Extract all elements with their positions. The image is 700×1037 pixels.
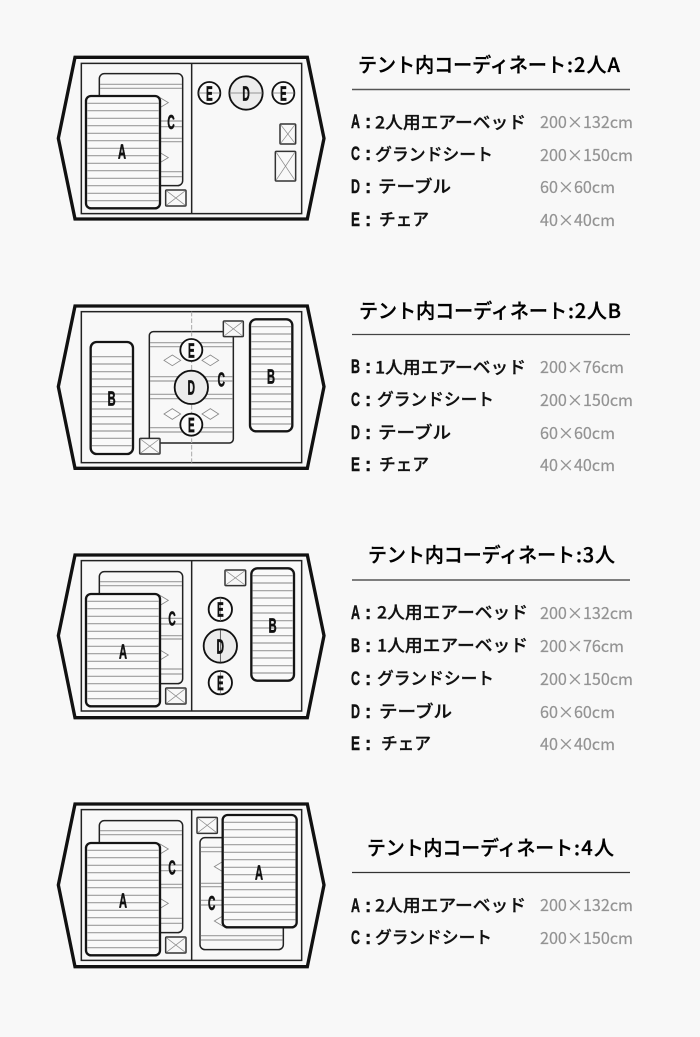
legend: 3 people: テーブル — [379, 698, 452, 723]
legend: 3 people: : — [365, 636, 371, 657]
legend: 4 people: 200×150cm — [540, 925, 633, 949]
chair E left — [198, 82, 220, 105]
air bed B: B — [269, 615, 277, 637]
chair E left: E — [206, 83, 213, 105]
table D — [175, 371, 208, 404]
storage box right — [197, 817, 217, 833]
ground sheet C — [149, 332, 233, 443]
legend: 3 people — [351, 580, 633, 755]
legend: 2 people A: 40×40cm — [540, 207, 615, 231]
inner floor with divider — [81, 561, 302, 711]
legend: 4 people: : — [365, 928, 371, 949]
legend: 3 people: : — [365, 702, 371, 723]
panel: tent layout 4 people — [58, 804, 324, 967]
air bed B left: B — [108, 389, 116, 411]
heading: 2 people B: テント内コーディネート — [359, 295, 567, 324]
legend: 2 people B: 1人用エアーベッド — [375, 354, 526, 379]
legend: 2 people B: 40×40cm — [540, 452, 615, 476]
legend: 2 people B: : — [365, 390, 371, 411]
tent outline — [58, 804, 324, 967]
table D — [204, 629, 237, 663]
legend: 2 people B: 200×150cm — [540, 387, 633, 411]
air bed B right: B — [267, 366, 275, 388]
storage box left — [166, 688, 186, 704]
legend: 2 people B: : — [365, 423, 371, 444]
ground sheet C right: C — [208, 893, 215, 915]
legend: 3 people: A — [351, 603, 360, 624]
storage box right — [225, 570, 246, 586]
dashed centre divider — [190, 312, 193, 463]
legend: 4 people — [351, 872, 633, 949]
air bed A — [86, 96, 160, 208]
legend: 2 people A: 200×150cm — [540, 142, 633, 166]
inner floor — [81, 312, 302, 463]
panel: tent layout 3 people — [58, 555, 324, 718]
storage box small — [280, 124, 296, 144]
ground sheet C: C — [167, 112, 175, 134]
legend: 3 people: D — [351, 702, 360, 723]
chair E top — [180, 339, 202, 362]
storage box left — [166, 937, 186, 953]
legend: 2 people A: : — [365, 177, 371, 198]
legend: 2 people B: : — [365, 357, 371, 378]
heading: 2 people A: :2人A — [567, 49, 621, 78]
legend: 3 people: チェア — [381, 730, 431, 755]
heading: 2 people A: テント内コーディネート — [358, 49, 566, 78]
chair E bottom: E — [188, 415, 195, 437]
legend: 2 people B: E — [351, 455, 360, 476]
ground sheet C: C — [168, 609, 176, 631]
air bed B right — [250, 319, 292, 431]
chair E top: E — [188, 340, 195, 362]
legend: 2 people A: C — [351, 144, 360, 165]
legend: 2 people A: 2人用エアーベッド — [375, 109, 526, 134]
legend: 2 people B: D — [351, 423, 360, 444]
legend: 3 people: E — [351, 734, 360, 755]
legend: 4 people: : — [365, 896, 371, 917]
ground sheet C — [99, 74, 183, 186]
ground sheet C left — [99, 821, 183, 933]
legend: 3 people: グランドシート — [377, 665, 494, 690]
legend: 3 people: C — [351, 669, 360, 690]
legend: 2 people A: D — [351, 177, 360, 198]
legend: 2 people B: C — [351, 390, 360, 411]
air bed A: A — [119, 641, 127, 663]
air bed A right — [223, 815, 297, 927]
air bed A right: A — [255, 863, 263, 885]
legend: 3 people: 200×76cm — [540, 633, 624, 657]
air bed B left — [91, 342, 133, 454]
legend: 2 people B: : — [365, 455, 371, 476]
legend: 3 people: 200×150cm — [540, 666, 633, 690]
legend: 3 people: 200×132cm — [540, 600, 633, 624]
tent outline — [58, 57, 324, 219]
legend: 3 people: : — [365, 603, 371, 624]
chair E bottom: E — [217, 673, 224, 695]
legend: 2 people A: A — [351, 112, 360, 133]
legend: 4 people: A — [351, 896, 360, 917]
air bed A — [86, 594, 160, 706]
legend: 3 people: 2人用エアーベッド — [377, 599, 528, 624]
storage box top — [223, 321, 243, 337]
legend: 2 people A: 200×132cm — [540, 109, 633, 133]
legend: 2 people A: : — [365, 210, 371, 231]
chair E right — [272, 82, 294, 105]
ground sheet C left: C — [168, 858, 176, 880]
legend: 3 people: B — [351, 636, 360, 657]
legend: 4 people: 2人用エアーベッド — [375, 892, 526, 917]
legend: 2 people B: グランドシート — [377, 386, 494, 411]
air bed A left — [86, 843, 160, 955]
table D: D — [217, 636, 224, 658]
legend: 2 people B — [351, 334, 633, 476]
legend: 2 people A: テーブル — [378, 173, 451, 198]
legend: 3 people: 1人用エアーベッド — [377, 632, 528, 657]
ground sheet C: C — [218, 369, 225, 391]
air bed A: A — [118, 142, 126, 164]
legend: 2 people B: チェア — [379, 451, 429, 476]
legend: 2 people A: 60×60cm — [540, 174, 615, 198]
legend: 4 people: 200×132cm — [540, 892, 633, 916]
chair E bottom — [180, 414, 202, 437]
heading: 4 people: テント内コーディネート — [367, 832, 573, 861]
heading: 3 people: :3人 — [576, 539, 615, 568]
heading: 2 people B: :2人B — [568, 295, 621, 324]
air bed A left: A — [119, 890, 127, 912]
ground sheet C right — [200, 838, 283, 950]
legend: 4 people: グランドシート — [375, 924, 492, 949]
legend: 2 people B: テーブル — [378, 419, 451, 444]
legend: 2 people A: グランドシート — [375, 141, 493, 166]
tent outline — [58, 306, 324, 468]
heading: 4 people: :4人 — [574, 832, 614, 861]
table D: D — [188, 378, 195, 400]
inner floor with divider — [81, 63, 302, 214]
chair E top — [209, 598, 232, 622]
legend: 2 people B: 200×76cm — [540, 354, 624, 378]
legend: 3 people: 40×40cm — [540, 731, 615, 755]
panel: tent layout 2 people B — [58, 306, 324, 468]
ground sheet C — [99, 572, 183, 684]
chair E bottom — [209, 671, 232, 695]
table D: D — [242, 83, 250, 105]
legend: 2 people A: : — [365, 112, 371, 133]
storage box — [166, 190, 186, 206]
legend: 2 people B: B — [351, 357, 360, 378]
legend: 3 people: : — [365, 669, 371, 690]
legend: 2 people A: E — [351, 210, 360, 231]
panel: tent layout 2 people A — [58, 57, 324, 219]
legend: 2 people A: : — [365, 144, 371, 165]
chair E top: E — [217, 600, 224, 622]
centre axis over sheet — [190, 332, 193, 443]
legend: 2 people B: 60×60cm — [540, 420, 615, 444]
legend: 2 people A: チェア — [379, 206, 429, 231]
table D — [229, 76, 263, 110]
storage box large — [275, 151, 296, 181]
heading: 3 people: テント内コーディネート — [368, 539, 575, 568]
storage box bottom — [140, 438, 160, 454]
legend: 2 people A — [351, 90, 633, 231]
tent outline — [58, 555, 324, 718]
legend: 3 people: 60×60cm — [540, 699, 615, 723]
legend: 4 people: C — [351, 928, 360, 949]
legend: 3 people: : — [365, 734, 371, 755]
air bed B — [251, 568, 294, 681]
chair E right: E — [280, 83, 287, 105]
chair legs diamonds — [164, 355, 219, 419]
inner floor with divider — [81, 810, 302, 960]
